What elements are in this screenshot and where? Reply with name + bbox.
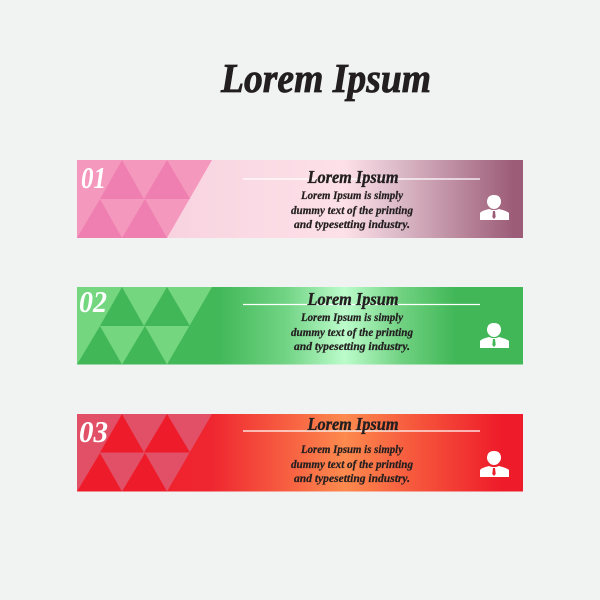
panel: step 03 bbox=[77, 414, 523, 492]
band background 03 bbox=[77, 414, 523, 492]
body text 02: dummy text of the printing bbox=[291, 325, 413, 339]
heading 01: Lorem Ipsum bbox=[307, 167, 398, 187]
title: Lorem Ipsum bbox=[220, 55, 431, 101]
triangle pattern 02 bbox=[77, 287, 212, 364]
number 01: 01 bbox=[81, 160, 106, 195]
divider line 03 bbox=[243, 430, 480, 432]
icon: person 02 bbox=[480, 323, 509, 348]
heading 03: Lorem Ipsum bbox=[307, 414, 398, 434]
body text 01 bbox=[291, 188, 413, 231]
body text 02 bbox=[291, 310, 413, 353]
body text 01: dummy text of the printing bbox=[291, 203, 413, 217]
divider line 02 bbox=[243, 304, 480, 306]
triangle pattern 01 bbox=[77, 160, 212, 238]
triangle pattern 03 bbox=[77, 414, 212, 492]
divider line 01 bbox=[243, 178, 480, 180]
heading 02: Lorem Ipsum bbox=[307, 289, 398, 309]
icon: person 03 bbox=[480, 451, 509, 477]
body text 03: and typesetting industry. bbox=[294, 471, 410, 485]
body text 01: and typesetting industry. bbox=[294, 217, 410, 231]
band background 02 bbox=[77, 287, 523, 364]
body text 02: and typesetting industry. bbox=[294, 339, 410, 353]
panel: step 02 bbox=[77, 284, 523, 364]
body text 03: dummy text of the printing bbox=[291, 457, 413, 471]
body text 03 bbox=[291, 442, 413, 485]
panel: step 01 bbox=[77, 160, 523, 238]
band background 01 bbox=[77, 160, 523, 238]
number 02: 02 bbox=[79, 284, 107, 319]
body text 03: Lorem Ipsum is simply bbox=[300, 442, 404, 456]
number 03: 03 bbox=[79, 414, 108, 449]
body text 02: Lorem Ipsum is simply bbox=[300, 310, 404, 324]
icon: person 01 bbox=[480, 195, 509, 220]
body text 01: Lorem Ipsum is simply bbox=[300, 188, 404, 202]
